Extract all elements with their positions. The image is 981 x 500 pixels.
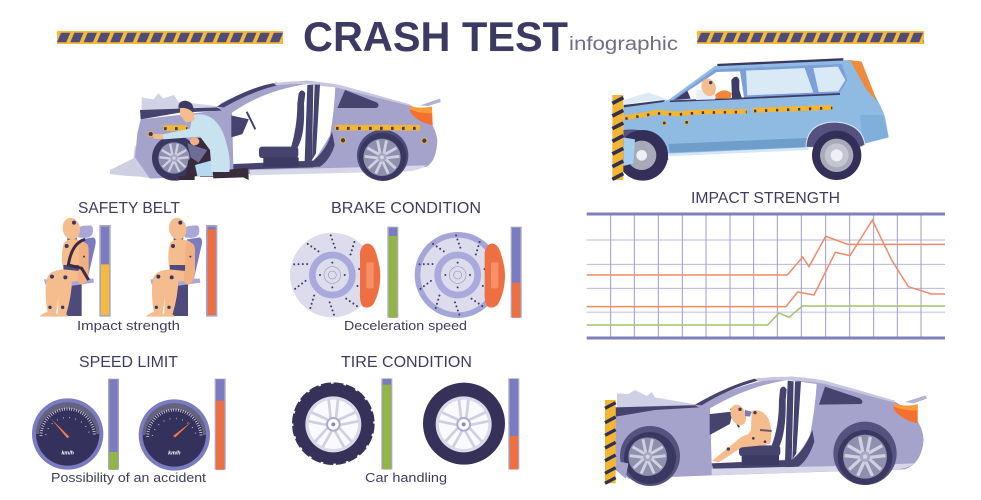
spoiler [905,395,927,403]
debris [110,145,152,178]
crash dummy [712,402,772,463]
rear wheel [357,130,408,181]
tire panel [293,378,519,469]
measuring tape [163,119,420,137]
dark hood strip [140,107,222,119]
rear wheel [812,131,861,180]
deceleration caption: Deceleration speed [344,318,467,333]
front wheel [616,420,680,486]
crash markers [148,131,427,143]
bar orange [508,378,519,469]
car body [616,377,924,479]
spoiler [420,99,441,106]
title: CRASH TEST [303,13,568,60]
pillars [785,381,794,461]
title subtitle: infographic [569,34,678,55]
measuring tape [624,107,832,119]
roof rack [717,59,843,65]
roof strip [695,379,758,405]
pillars [305,85,313,161]
barrier [605,400,616,483]
brake panel [290,227,522,318]
taillight [410,106,433,125]
impact strength caption: Impact strength [77,318,180,333]
orange series one [587,236,945,275]
bald tire [423,383,505,465]
crash markers [662,120,689,125]
grid [587,214,945,338]
new brake disc [290,233,380,317]
crumpled hood [623,93,668,105]
sill [250,165,427,175]
seat [739,387,787,465]
dark hood strip [616,405,699,417]
bar green [108,379,119,470]
bar orange [215,379,226,470]
rear window [819,387,862,405]
belted dummy [39,216,96,317]
sill [666,147,808,156]
safety belt heading: SAFETY BELT [78,200,181,217]
hazard stripe right [697,31,924,44]
barrier [612,95,623,180]
hazard stripe left [57,31,283,44]
car with technician [110,81,441,181]
SUV against barrier [612,59,889,181]
brake condition heading: BRAKE CONDITION [331,200,481,217]
impact strength line chart [587,214,945,338]
bar green [387,227,398,318]
speed limit heading: SPEED LIMIT [79,354,179,371]
lower band [668,138,813,153]
car handling caption: Car handling [365,470,447,485]
crashed car with dummy [605,377,927,486]
technician [153,101,249,180]
safety belt panel [39,216,217,317]
front wheel [152,135,197,181]
accident caption: Possibility of an accident [51,470,206,485]
treaded tire [293,383,374,464]
door opening [710,380,817,463]
green series [587,306,945,325]
frame [587,214,945,338]
slow gauge [32,398,103,470]
unbelted dummy [146,216,202,317]
car body [135,81,437,179]
fast gauge: km/h [168,451,181,457]
crumpled hood [617,390,697,407]
bar yellow [99,225,111,317]
worn brake disc [415,232,505,318]
crumpled hood [142,93,218,111]
rear window [337,90,379,108]
driver dummy [696,76,742,100]
speed limit panel [32,379,226,471]
side windows [746,68,813,95]
fast gauge [139,399,210,471]
seat [259,90,305,167]
sill [712,463,915,475]
taillight [894,403,918,423]
bar green [381,378,392,469]
door opening [232,84,335,165]
rear stripe [850,60,877,102]
front wheel [617,130,668,181]
dashboard and steering wheel [232,112,255,136]
rear wheel [833,422,897,485]
impact strength heading: IMPACT STRENGTH [691,190,840,207]
slow gauge: km/h [61,451,75,457]
tire condition heading: TIRE CONDITION [341,354,472,371]
orange series two [587,220,945,307]
SUV body [623,60,889,154]
rear arch [806,122,865,147]
dashboard and steering wheel [711,409,739,433]
bar orange [206,225,217,317]
roof strip [217,83,280,107]
bar orange [511,227,522,318]
window frame [669,64,847,102]
